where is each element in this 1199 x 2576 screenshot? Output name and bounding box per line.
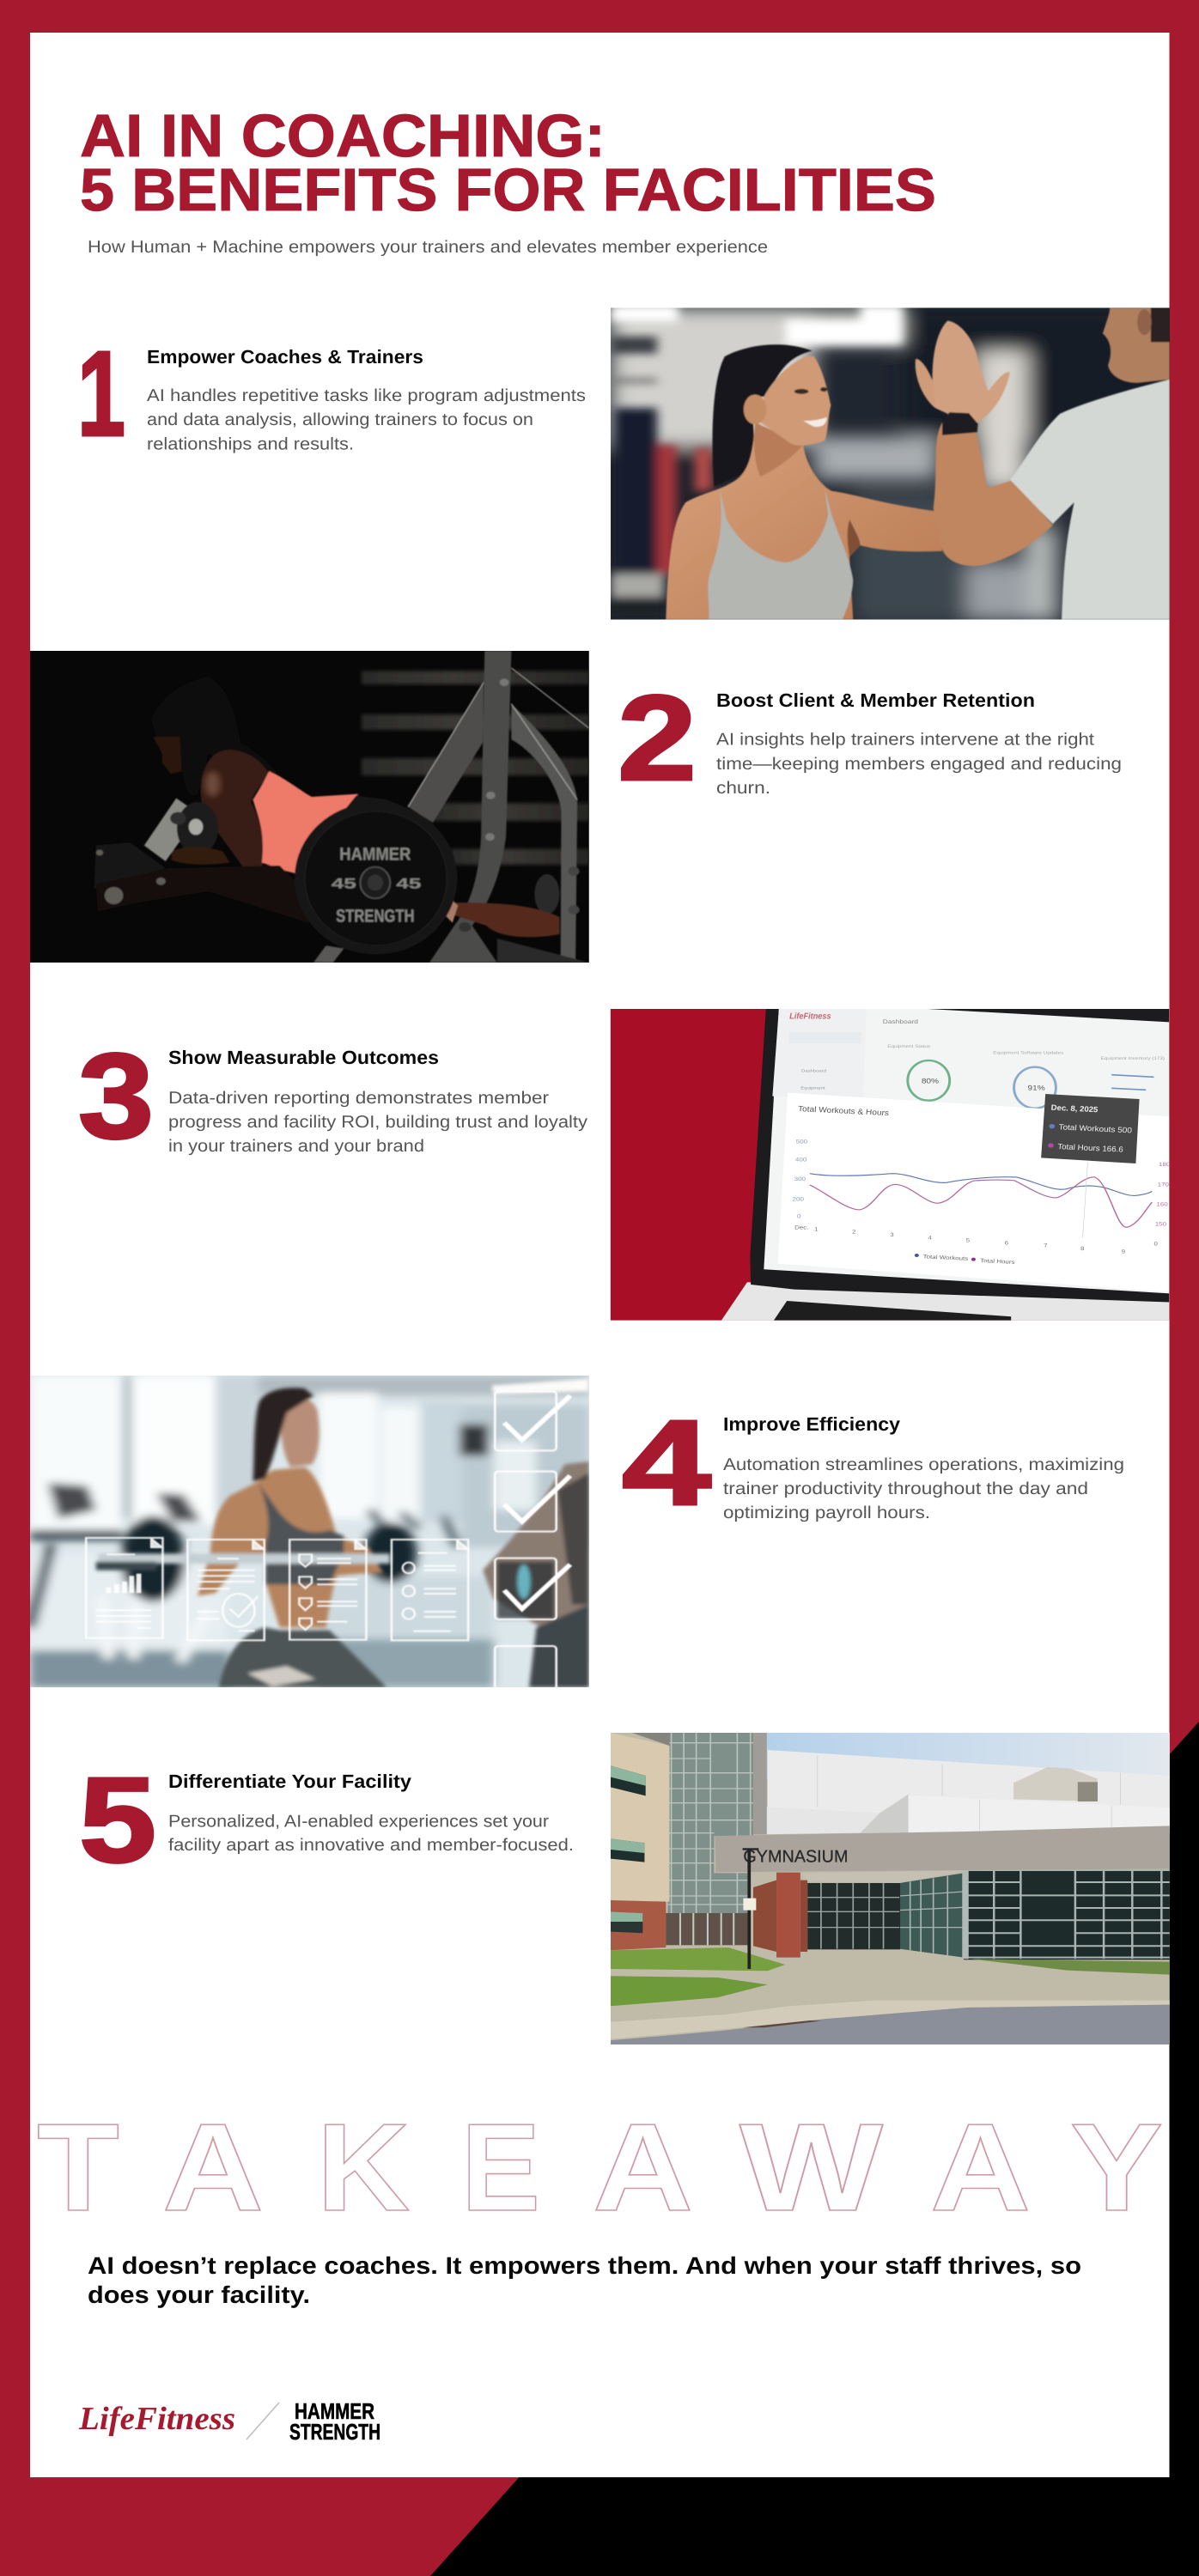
numeral 5: 5 bbox=[79, 1752, 156, 1887]
body 1 bbox=[147, 386, 586, 453]
title bbox=[80, 102, 936, 223]
photo 3: laptop dashboard: 91% bbox=[1028, 1084, 1045, 1091]
checkbox column bbox=[495, 1391, 570, 1704]
takeaway outline word: A bbox=[593, 2098, 693, 2237]
takeaway outline word: E bbox=[461, 2098, 540, 2237]
photo 3: laptop dashboard: 150 bbox=[1155, 1221, 1166, 1227]
logo: Hammer Strength: STRENGTH bbox=[289, 2419, 380, 2445]
logo: Life Fitness: LifeFitness bbox=[78, 2401, 235, 2437]
photo 4: athlete with digital checklist overlays bbox=[30, 1376, 590, 1704]
takeaway statement: AI doesn’t replace coaches. It empowers them. And when your staff thrives, so bbox=[88, 2252, 1081, 2279]
body 3: progress and facility ROI, building trust and loyalty bbox=[168, 1113, 587, 1132]
numeral 4: 4 bbox=[622, 1394, 711, 1530]
photo 3: laptop dashboard: Equipment Status bbox=[887, 1044, 930, 1048]
subtitle: How Human + Machine empowers your trainers and elevates member experience bbox=[88, 238, 768, 257]
background: black diagonal corner bbox=[430, 1722, 1199, 2576]
chart legend bbox=[915, 1254, 1015, 1266]
chart axis labels bbox=[793, 1139, 807, 1219]
photo 3: laptop dashboard: Dashboard bbox=[883, 1018, 918, 1025]
body 4: Automation streamlines operations, maximizing bbox=[723, 1455, 1124, 1474]
photo 3: laptop dashboard: 4 bbox=[928, 1235, 932, 1241]
body 4 bbox=[723, 1455, 1124, 1522]
heading 2: Boost Client & Member Retention bbox=[716, 690, 1035, 711]
photo 3: laptop dashboard: 80% bbox=[922, 1078, 939, 1085]
panel: benefit 5 text bbox=[79, 1752, 574, 1887]
chart axis labels: 200 bbox=[793, 1196, 804, 1202]
chart axis labels: 400 bbox=[795, 1157, 806, 1163]
photo 3: laptop dashboard: 8 bbox=[1080, 1246, 1084, 1252]
body 1: and data analysis, allowing trainers to focus on bbox=[147, 410, 533, 429]
photo 2: athlete on Hammer Strength machine bbox=[30, 651, 590, 963]
plate label bbox=[332, 844, 421, 926]
body 3: in your trainers and your brand bbox=[168, 1137, 424, 1156]
laptop base bbox=[720, 1282, 1174, 1322]
weight plate bbox=[295, 803, 457, 954]
takeaway outline word: A bbox=[162, 2098, 264, 2237]
photo 1: trainer and member high five bbox=[611, 305, 1174, 623]
numeral 3: 3 bbox=[78, 1028, 154, 1163]
body 4: trainer productivity throughout the day and bbox=[723, 1479, 1088, 1498]
hand bbox=[933, 320, 1010, 422]
photo 3: laptop dashboard: 7 bbox=[1044, 1242, 1048, 1249]
body 1: relationships and results. bbox=[147, 434, 354, 453]
photo 3: laptop dashboard: Dec. bbox=[794, 1224, 809, 1230]
photo 3: laptop dashboard: Equipment Inventory (173) bbox=[1101, 1056, 1165, 1060]
takeaway outline word: T bbox=[37, 2098, 119, 2237]
man arm bbox=[934, 422, 1053, 566]
panel: benefit 1 text bbox=[77, 325, 586, 461]
watch bbox=[942, 412, 978, 435]
canopy bbox=[715, 1826, 1170, 1872]
body 1: AI handles repetitive tasks like program adjustments bbox=[147, 386, 586, 405]
shirt bbox=[1010, 380, 1170, 619]
title: AI IN COACHING: bbox=[80, 102, 606, 169]
hair bbox=[712, 344, 813, 487]
title: 5 BENEFITS FOR FACILITIES bbox=[80, 156, 936, 223]
chart title: Total Workouts & Hours bbox=[798, 1104, 889, 1117]
photo 3: laptop dashboard: Equipment bbox=[800, 1085, 825, 1090]
photo 3: laptop dashboard: 180 bbox=[1159, 1162, 1170, 1168]
heading 4: Improve Efficiency bbox=[723, 1413, 901, 1435]
takeaway statement: does your facility. bbox=[88, 2281, 310, 2308]
photo 3: laptop dashboard: 1 bbox=[814, 1226, 819, 1232]
grounds bbox=[611, 1947, 785, 1971]
plate label: 45 bbox=[396, 876, 421, 891]
takeaway outline word bbox=[37, 2098, 1163, 2237]
woman body bbox=[666, 422, 942, 619]
hand bbox=[483, 1461, 589, 1662]
entrance bbox=[807, 1883, 900, 1949]
hair bbox=[151, 677, 276, 796]
body 3 bbox=[168, 1089, 587, 1156]
chart card bbox=[778, 1093, 1174, 1292]
tank top bbox=[708, 488, 853, 619]
body 2: AI insights help trainers intervene at the right bbox=[716, 730, 1094, 749]
logo: Hammer Strength: HAMMER bbox=[295, 2398, 374, 2424]
body 3: Data-driven reporting demonstrates member bbox=[168, 1089, 549, 1108]
heading 5: Differentiate Your Facility bbox=[168, 1771, 412, 1792]
skin behind plate bbox=[445, 900, 459, 923]
numeral 2: 2 bbox=[618, 670, 697, 805]
left beige wing bbox=[611, 1733, 669, 1902]
chart tooltip: Dec. 8, 2025 bbox=[1050, 1103, 1099, 1114]
photo 3: laptop dashboard: Dashboard bbox=[801, 1068, 826, 1072]
plate label: STRENGTH bbox=[336, 906, 414, 926]
plate label: 45 bbox=[332, 876, 356, 891]
photo 3: laptop dashboard: 6 bbox=[1005, 1240, 1008, 1246]
chart tooltip: Total Workouts 500 bbox=[1058, 1122, 1132, 1134]
heading 3: Show Measurable Outcomes bbox=[168, 1047, 439, 1068]
dashboard screen bbox=[764, 1007, 1174, 1294]
photo 3: laptop dashboard: LifeFitness bbox=[789, 1012, 831, 1021]
chart tooltip: Total Hours 166.6 bbox=[1057, 1142, 1123, 1154]
chart legend: Total Hours bbox=[980, 1258, 1015, 1266]
bench bbox=[94, 842, 166, 889]
laptop bezel bbox=[750, 1007, 1174, 1303]
body 2: time—keeping members engaged and reducing bbox=[716, 755, 1122, 774]
arm pad bbox=[143, 798, 188, 862]
line chart bbox=[810, 1162, 1152, 1238]
body 2: churn. bbox=[716, 779, 770, 798]
panel: benefit 4 text bbox=[622, 1394, 1124, 1530]
takeaway outline word: K bbox=[317, 2098, 410, 2237]
photo 3: laptop dashboard: 170 bbox=[1158, 1182, 1169, 1188]
body 5: Personalized, AI-enabled experiences set your bbox=[168, 1812, 549, 1831]
chart tooltip bbox=[1041, 1094, 1140, 1163]
lamp post bbox=[743, 1848, 758, 1969]
arm and shoulder bbox=[200, 750, 269, 872]
chart legend: Total Workouts bbox=[922, 1254, 969, 1262]
machine frame bbox=[408, 683, 484, 823]
body 5: facility apart as innovative and member-focused. bbox=[168, 1836, 574, 1855]
photo 3: laptop dashboard bbox=[610, 1005, 1177, 1322]
gymnasium sign: GYMNASIUM bbox=[743, 1846, 848, 1866]
takeaway statement bbox=[88, 2252, 1081, 2308]
photo 3: laptop dashboard: 160 bbox=[1156, 1201, 1168, 1207]
face bbox=[760, 356, 831, 446]
photo 3: laptop dashboard: 9 bbox=[1122, 1249, 1125, 1255]
photo 3: laptop dashboard: 0 bbox=[1153, 1241, 1158, 1247]
woman bbox=[198, 1467, 383, 1627]
plate label: HAMMER bbox=[339, 844, 411, 864]
photo 3: laptop dashboard: 5 bbox=[966, 1237, 970, 1243]
photo 3: laptop dashboard: 3 bbox=[890, 1232, 894, 1238]
photo 5: gymnasium building bbox=[611, 1733, 1171, 2044]
man head bbox=[1103, 307, 1170, 383]
heading 1: Empower Coaches & Trainers bbox=[147, 346, 423, 368]
doors bbox=[666, 1913, 748, 1945]
photo 3: laptop dashboard: Equipment Software Updates bbox=[993, 1050, 1063, 1055]
chart axis labels: 500 bbox=[796, 1139, 807, 1145]
tower bbox=[667, 1733, 753, 1913]
body 2 bbox=[716, 730, 1122, 798]
chart axis labels: 0 bbox=[797, 1213, 800, 1219]
glass right wall bbox=[964, 1869, 1171, 1959]
takeaway outline word: Y bbox=[1070, 2098, 1163, 2237]
takeaway outline word: W bbox=[739, 2098, 883, 2237]
logo divider bbox=[246, 2403, 279, 2439]
tank top bbox=[253, 771, 358, 880]
numeral 1: 1 bbox=[77, 325, 125, 461]
thigh bbox=[451, 902, 559, 937]
logo: Hammer Strength bbox=[289, 2398, 380, 2445]
body 4: optimizing payroll hours. bbox=[723, 1504, 930, 1522]
body 5 bbox=[168, 1812, 574, 1855]
panel: benefit 3 text bbox=[78, 1028, 587, 1163]
photo 3: laptop dashboard: 2 bbox=[852, 1229, 855, 1235]
panel: benefit 2 text bbox=[618, 670, 1122, 805]
checklist documents bbox=[86, 1538, 468, 1640]
chart axis labels: 300 bbox=[794, 1176, 806, 1182]
takeaway outline word: A bbox=[930, 2098, 1031, 2237]
